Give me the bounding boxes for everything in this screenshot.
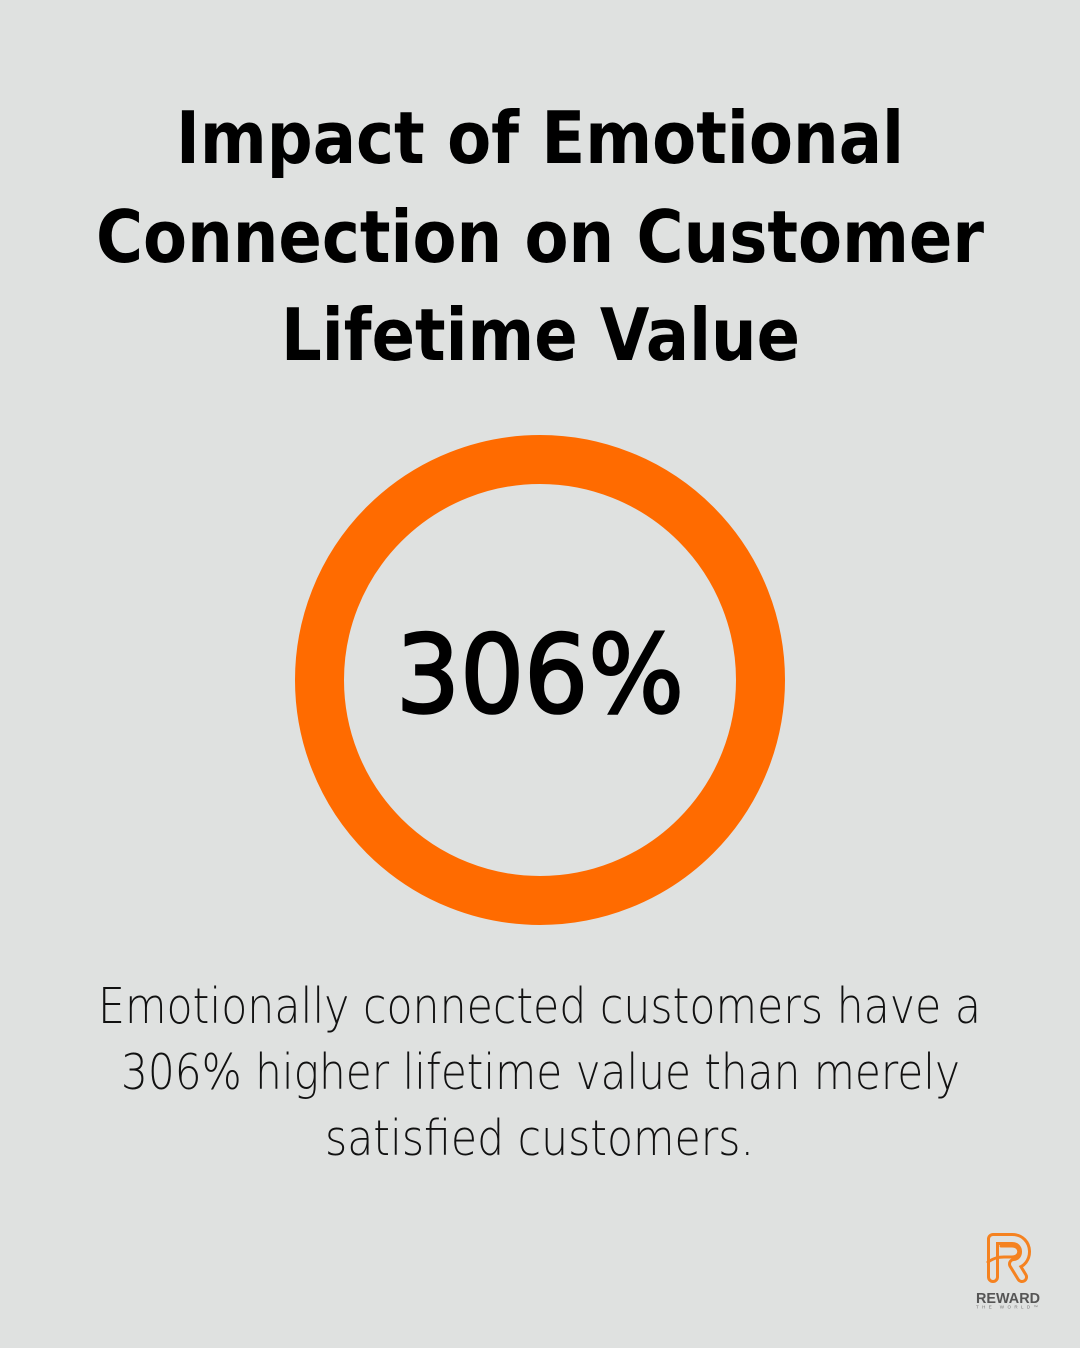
donut ring chart xyxy=(320,460,760,900)
title: Connection on Customer xyxy=(96,195,984,279)
description text: satisfied customers. xyxy=(325,1110,754,1167)
logo: Reward the World: REWARD xyxy=(976,1290,1040,1307)
logo: Reward the World xyxy=(976,1239,1040,1310)
description text: 306% higher lifetime value than merely xyxy=(121,1044,960,1101)
title xyxy=(96,96,984,377)
title: Impact of Emotional xyxy=(176,96,904,180)
stat value: 306% xyxy=(396,613,684,738)
logo: Reward the World: THE WORLD™ xyxy=(976,1304,1038,1310)
description text xyxy=(98,978,981,1167)
title: Lifetime Value xyxy=(281,293,800,377)
